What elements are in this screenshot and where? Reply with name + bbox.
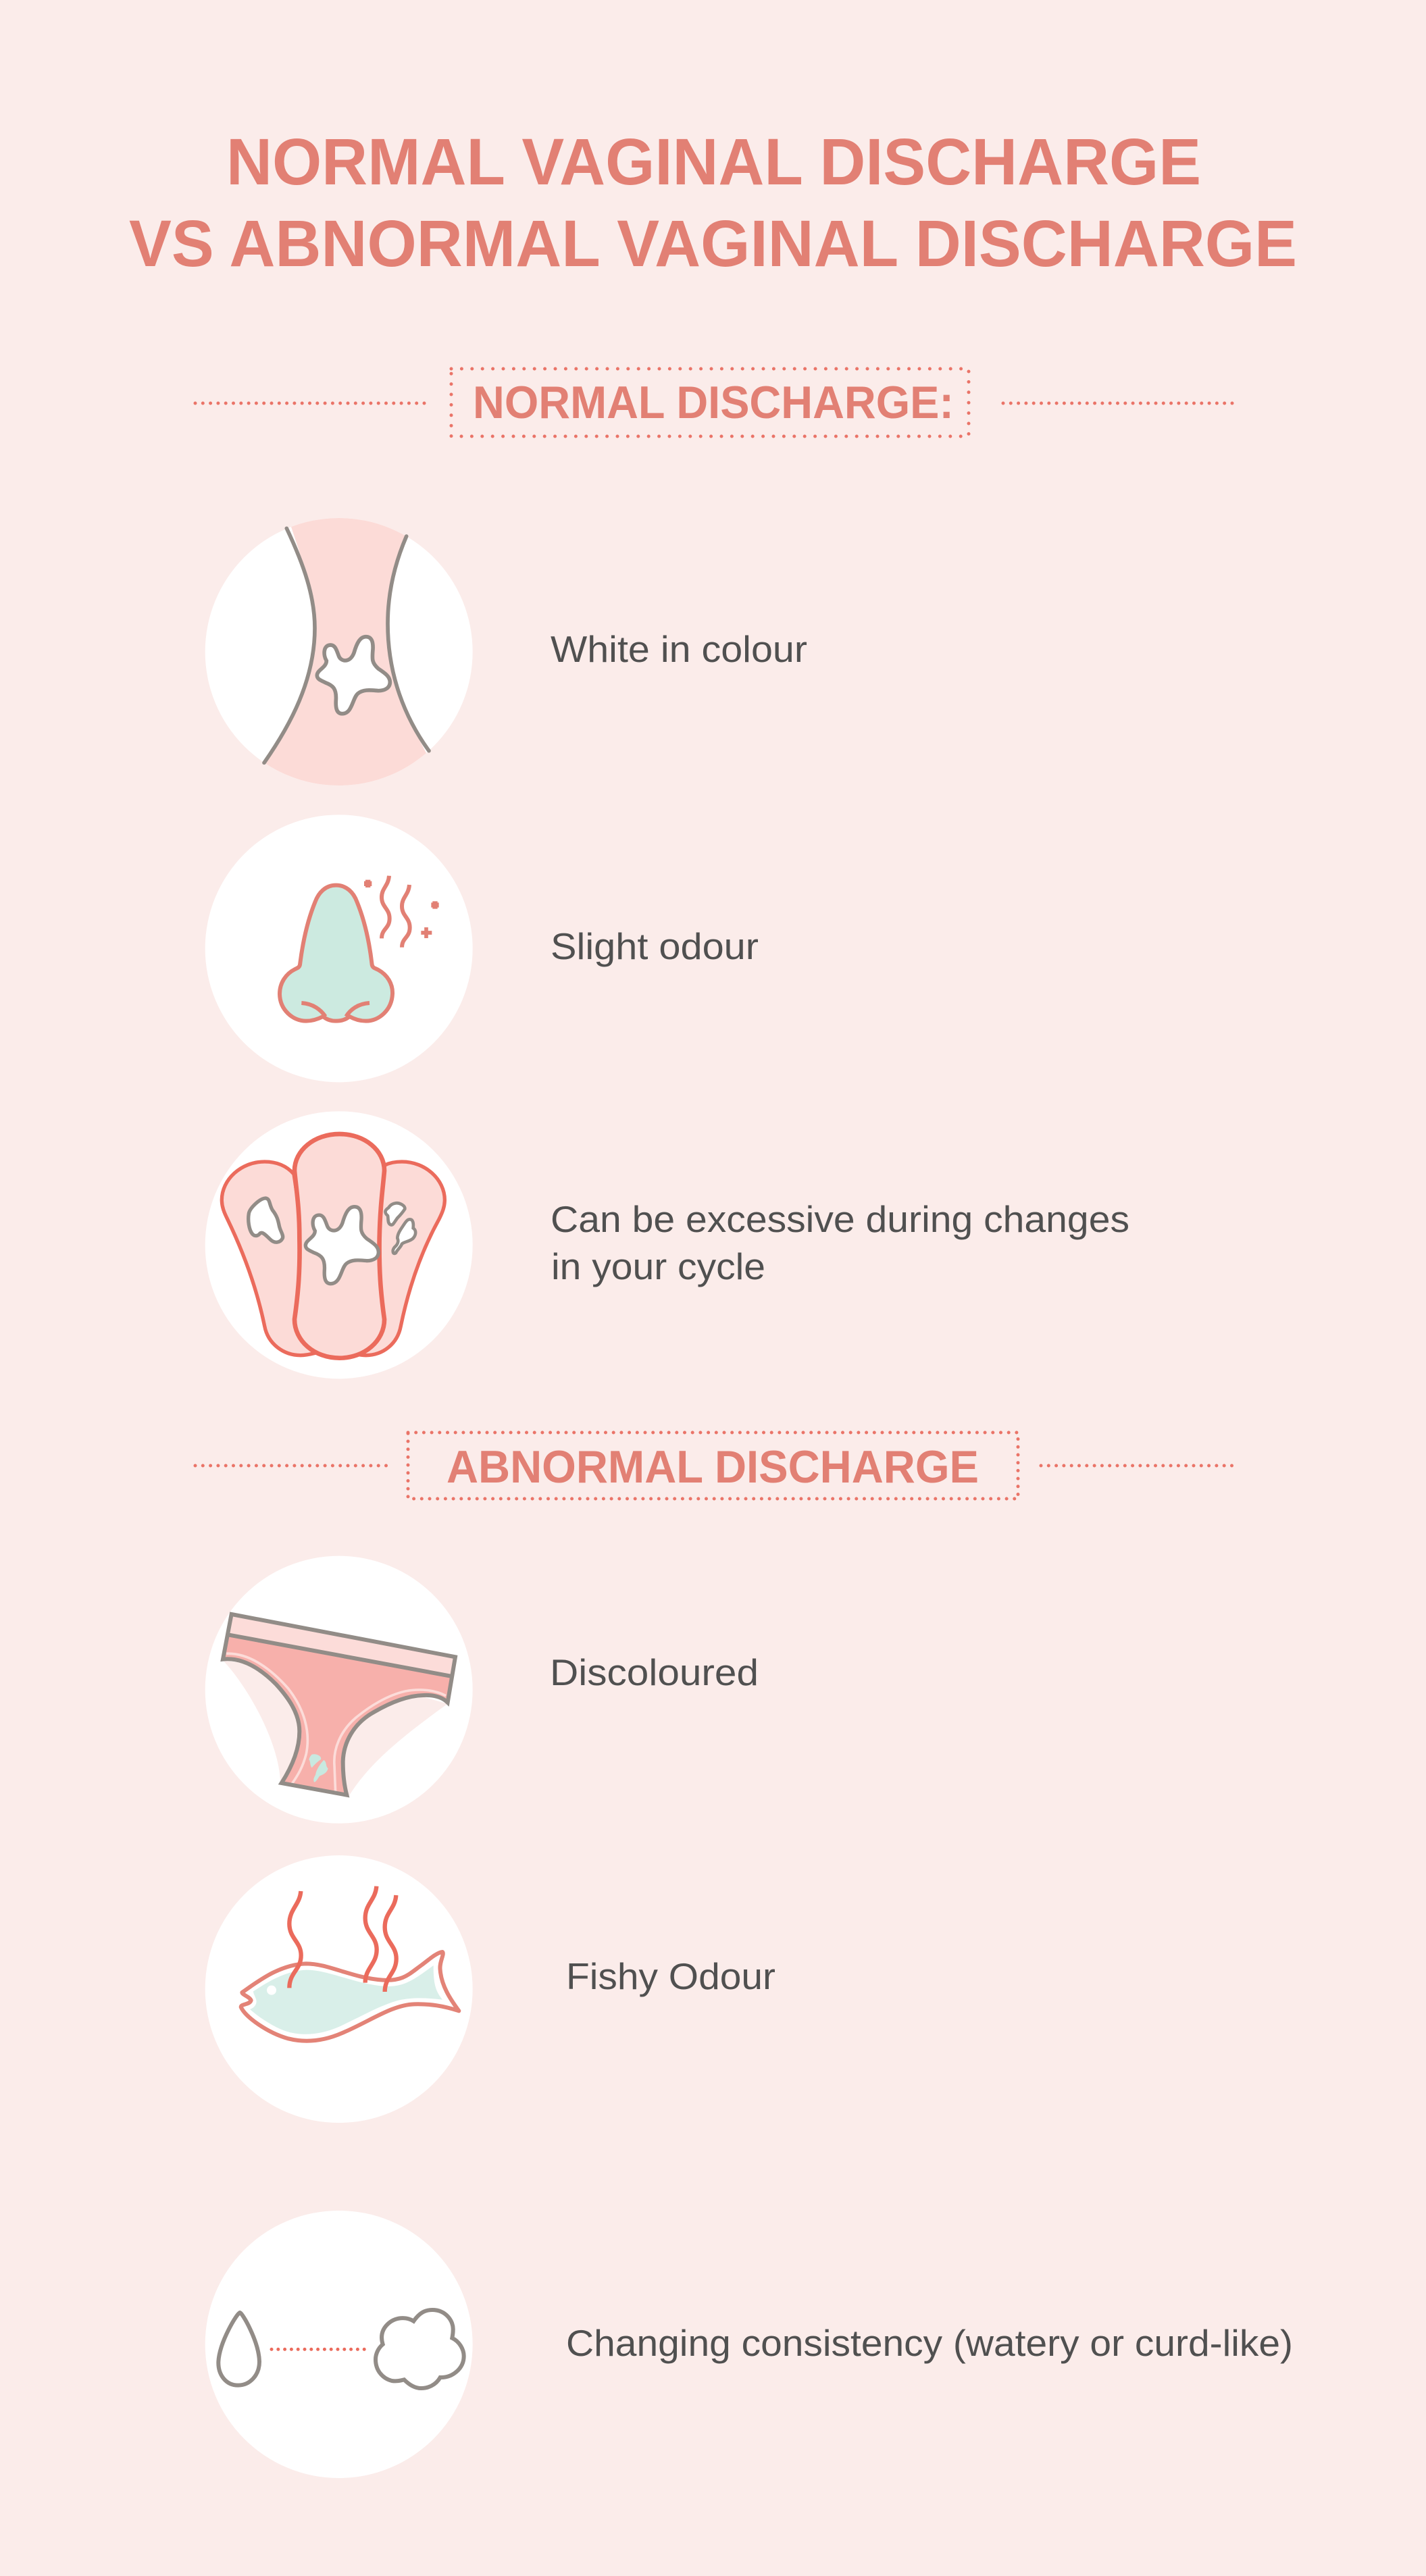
title: NORMAL VAGINAL DISCHARGE	[226, 125, 1201, 199]
icon: nose with slight odour	[205, 815, 473, 1082]
icon: pads with discharge	[205, 1111, 473, 1379]
text: discoloured: Discoloured	[550, 1651, 759, 1693]
icon: white discharge on underwear	[205, 513, 473, 792]
section heading: normal discharge: NORMAL DISCHARGE:	[473, 377, 954, 428]
title	[129, 125, 1297, 280]
text: can be excessive during changes in your cycle: in your cycle	[551, 1245, 765, 1287]
text: changing consistency: Changing consistency (watery or curd-like)	[566, 2322, 1293, 2364]
icon: fish with odour	[205, 1855, 473, 2123]
title: VS ABNORMAL VAGINAL DISCHARGE	[129, 207, 1297, 280]
text: can be excessive during changes in your cycle	[551, 1198, 1129, 1287]
section heading: abnormal discharge	[195, 1433, 1236, 1499]
text: white in colour: White in colour	[551, 628, 807, 670]
icon: drop to curd consistency	[205, 2211, 473, 2478]
icon: discoloured underwear	[205, 1556, 473, 1824]
text: can be excessive during changes in your cycle: Can be excessive during changes	[551, 1198, 1129, 1240]
text: slight odour: Slight odour	[551, 925, 759, 967]
section heading: abnormal discharge: ABNORMAL DISCHARGE	[447, 1441, 979, 1493]
section heading: normal discharge	[195, 369, 1236, 436]
text: fishy odour: Fishy Odour	[566, 1955, 775, 1997]
